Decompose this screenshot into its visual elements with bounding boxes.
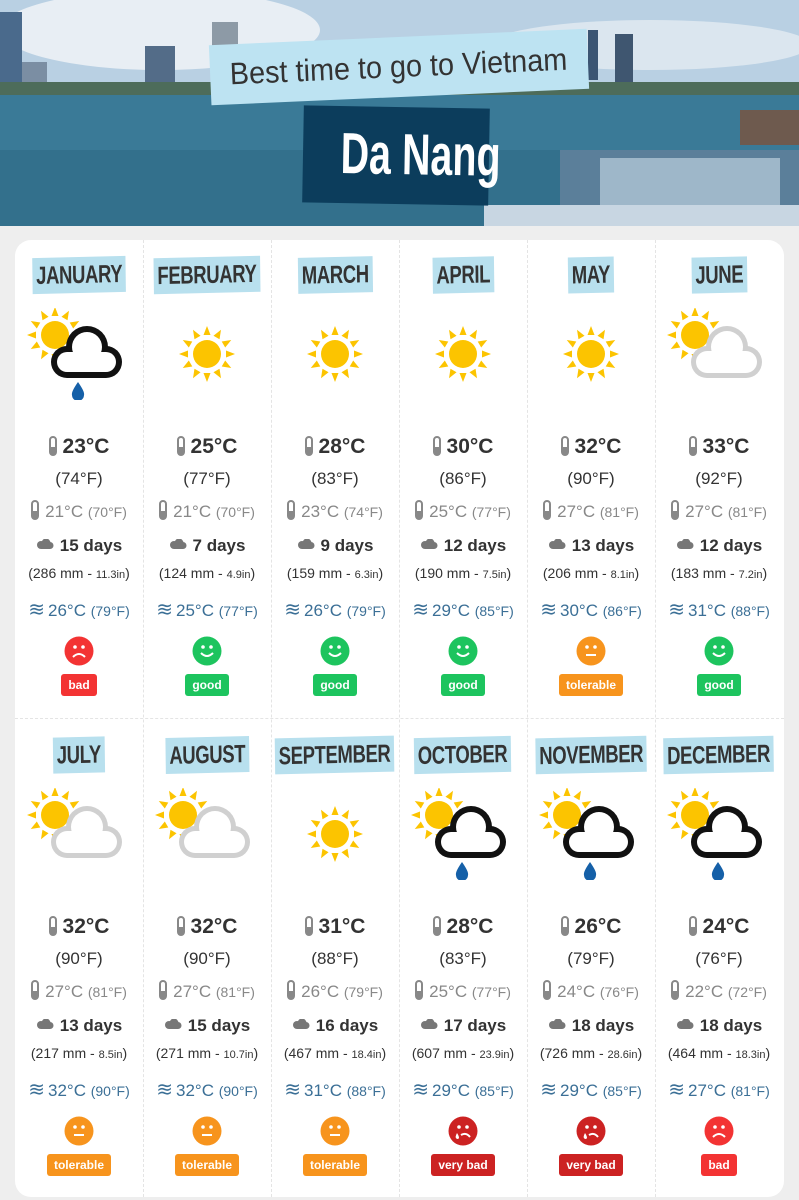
month: July: (217 mm - 8.5in) <box>31 1045 127 1061</box>
month: January: 23°C <box>63 435 109 458</box>
month: November: NOVEMBER <box>539 740 643 770</box>
title: Da Nang <box>302 105 490 206</box>
month: March: good <box>320 678 350 692</box>
month: February <box>154 256 260 696</box>
month: June: (183 mm - 7.2in) <box>671 565 767 581</box>
month: June: good <box>704 678 734 692</box>
month: November: 26°C <box>575 915 621 938</box>
month: January: ≋26°C (79°F) <box>28 599 130 621</box>
title: Da Nang: Da Nang <box>340 121 501 189</box>
month: August: ≋32°C (90°F) <box>156 1079 258 1101</box>
month: April: ≋29°C (85°F) <box>412 599 514 621</box>
month: July: 13 days <box>60 1016 122 1035</box>
month: December: 24°C <box>703 915 749 938</box>
month: April: 25°C (77°F) <box>429 502 511 521</box>
month: January: 15 days <box>60 536 122 555</box>
month: February: 7 days <box>193 536 245 555</box>
month: July: 27°C (81°F) <box>45 982 127 1001</box>
month: September: (88°F) <box>311 949 359 968</box>
month: June: 12 days <box>700 536 762 555</box>
month: April: good <box>448 678 478 692</box>
month: February: 25°C <box>191 435 237 458</box>
month: December: 22°C (72°F) <box>685 982 767 1001</box>
month: September: 31°C <box>319 915 365 938</box>
month: July: ≋32°C (90°F) <box>28 1079 130 1101</box>
month: October: ≋29°C (85°F) <box>412 1079 514 1101</box>
month: December: 18 days <box>700 1016 762 1035</box>
month: November: (79°F) <box>567 949 615 968</box>
month: April: 30°C <box>447 435 493 458</box>
month: September: (467 mm - 18.4in) <box>284 1045 386 1061</box>
month: August: 32°C <box>191 915 237 938</box>
month: May: 27°C (81°F) <box>557 502 639 521</box>
month: June: 33°C <box>703 435 749 458</box>
month: September: SEPTEMBER <box>279 740 391 770</box>
month: July: JULY <box>57 740 101 770</box>
month: December: (464 mm - 18.3in) <box>668 1045 770 1061</box>
month: May: (206 mm - 8.1in) <box>543 565 639 581</box>
month: June: JUNE <box>695 260 743 290</box>
month: May: 13 days <box>572 536 634 555</box>
month: June <box>667 256 770 696</box>
month: January: (286 mm - 11.3in) <box>28 565 130 581</box>
header photo banner <box>0 0 799 226</box>
month: January: bad <box>68 678 90 692</box>
month: October: OCTOBER <box>418 740 508 770</box>
month: October: 28°C <box>447 915 493 938</box>
month: May <box>540 256 642 696</box>
month: February: (124 mm - 4.9in) <box>159 565 255 581</box>
panel: monthly weather card <box>15 240 784 1197</box>
month: March: 9 days <box>321 536 373 555</box>
month: August: (271 mm - 10.7in) <box>156 1045 258 1061</box>
month: February: (77°F) <box>183 469 231 488</box>
month: December <box>663 736 774 1176</box>
month: March: MARCH <box>301 260 369 290</box>
month: January <box>27 256 130 696</box>
month: September: tolerable <box>310 1158 360 1172</box>
month: July: (90°F) <box>55 949 103 968</box>
month: December: bad <box>708 1158 730 1172</box>
month: November: 18 days <box>572 1016 634 1035</box>
month: June: ≋31°C (88°F) <box>668 599 770 621</box>
month: January: JANUARY <box>36 260 122 290</box>
month: August: AUGUST <box>169 740 245 770</box>
subtitle banner: Best time to go to Vietnam <box>230 42 568 91</box>
month: October: (607 mm - 23.9in) <box>412 1045 514 1061</box>
month: November <box>535 736 647 1176</box>
month: September: 16 days <box>316 1016 378 1035</box>
month: May: MAY <box>572 261 610 289</box>
month: November: (726 mm - 28.6in) <box>540 1045 642 1061</box>
month: August: 27°C (81°F) <box>173 982 255 1001</box>
month: April: APRIL <box>436 260 490 290</box>
month: March: 28°C <box>319 435 365 458</box>
month: January: 21°C (70°F) <box>45 502 127 521</box>
month: November: 24°C (76°F) <box>557 982 639 1001</box>
month: August: tolerable <box>182 1158 232 1172</box>
month: June: 27°C (81°F) <box>685 502 767 521</box>
month: May: tolerable <box>566 678 616 692</box>
month: October: (83°F) <box>439 949 487 968</box>
subtitle banner <box>209 29 589 105</box>
month: February: ≋25°C (77°F) <box>156 599 258 621</box>
month: September: 26°C (79°F) <box>301 982 383 1001</box>
month: December: ≋27°C (81°F) <box>668 1079 770 1101</box>
month: March: (159 mm - 6.3in) <box>287 565 383 581</box>
month: February: FEBRUARY <box>157 260 257 290</box>
month: September: ≋31°C (88°F) <box>284 1079 386 1101</box>
month: November: very bad <box>566 1158 616 1172</box>
month: April: (190 mm - 7.5in) <box>415 565 511 581</box>
month: December: (76°F) <box>695 949 743 968</box>
month: March: ≋26°C (79°F) <box>284 599 386 621</box>
month: October: very bad <box>438 1158 488 1172</box>
month: October: 25°C (77°F) <box>429 982 511 1001</box>
month: May: 32°C <box>575 435 621 458</box>
month: July: tolerable <box>54 1158 104 1172</box>
month: August: 15 days <box>188 1016 250 1035</box>
month: February: 21°C (70°F) <box>173 502 255 521</box>
month: October <box>411 736 514 1176</box>
month: April: (86°F) <box>439 469 487 488</box>
month: January: (74°F) <box>55 469 103 488</box>
month: September <box>274 736 394 1176</box>
month: May: (90°F) <box>567 469 615 488</box>
month: June: (92°F) <box>695 469 743 488</box>
month: July: 32°C <box>63 915 109 938</box>
month: July <box>27 736 130 1176</box>
month: August <box>155 736 258 1176</box>
month: May: ≋30°C (86°F) <box>540 599 642 621</box>
month: February: good <box>192 678 222 692</box>
month: March: 23°C (74°F) <box>301 502 383 521</box>
month: August: (90°F) <box>183 949 231 968</box>
month: April <box>412 256 514 696</box>
month: March: (83°F) <box>311 469 359 488</box>
month: November: ≋29°C (85°F) <box>540 1079 642 1101</box>
month: March <box>284 256 386 696</box>
month: October: 17 days <box>444 1016 506 1035</box>
month: December: DECEMBER <box>667 740 771 770</box>
month: April: 12 days <box>444 536 506 555</box>
